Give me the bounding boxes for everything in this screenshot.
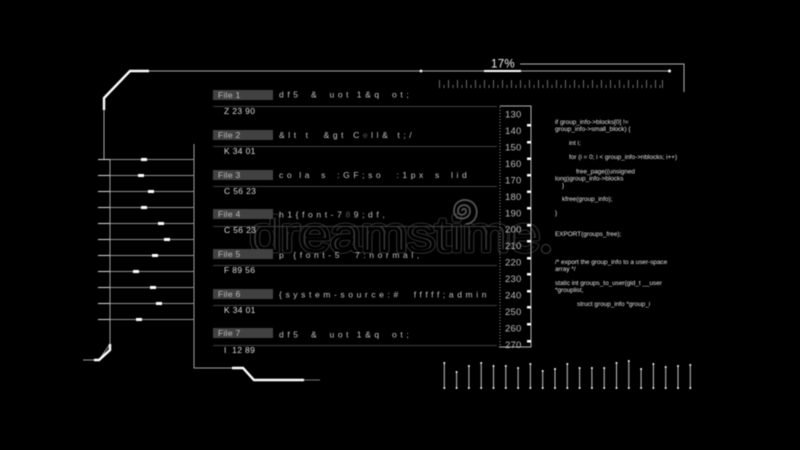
file 3: co la s :GF;so :1px s lid [279, 170, 470, 180]
source code block: } [555, 210, 558, 217]
source code block: kfree(group_info); [562, 196, 613, 203]
source code block: } [562, 182, 565, 190]
source code block: if group_info->blocks[0] != [555, 119, 629, 126]
file 1: df5 & uot 1&q ot; [279, 90, 412, 100]
file 5 [213, 249, 423, 275]
left slider panel [83, 144, 320, 380]
file 7: File 7 [218, 328, 241, 338]
scale numbers: 190 [505, 208, 521, 220]
source code block: struct group_info *group_i [577, 301, 650, 308]
file 5: p {font-5 7:normal, [279, 250, 423, 260]
file 7 [213, 328, 412, 355]
file 2: File 2 [218, 130, 241, 140]
scale numbers: 180 [505, 192, 521, 203]
file 3: C 56 23 [224, 186, 256, 196]
file 2 [213, 130, 415, 156]
source code block: array */ [555, 266, 576, 273]
scale numbers [505, 110, 521, 351]
file 7: df5 & uot 1&q ot; [279, 330, 412, 340]
source code block: for (i = 0; i < group_info->nblocks; i++) [569, 154, 677, 161]
source code block: free_page((unsigned [576, 168, 635, 176]
source code block: int i; [569, 140, 581, 147]
file 4: File 4 [218, 209, 241, 219]
source code block: static int groups_to_user(gid_t __user [555, 280, 663, 287]
scale numbers: 230 [505, 274, 521, 285]
file 3: File 3 [218, 170, 241, 180]
file 6: K 34 01 [224, 305, 256, 315]
slider knobs [133, 158, 170, 321]
source code block: group_info->small_block) { [555, 126, 631, 133]
file row dividers [213, 106, 497, 346]
scale numbers: 200 [505, 224, 521, 236]
file 6: File 6 [218, 289, 241, 299]
slider ticks [98, 160, 110, 320]
file 4: h1{font-789;df, [279, 210, 388, 220]
source code block: EXPORT(groups_free); [555, 231, 622, 238]
gauge caps [443, 360, 691, 389]
scale numbers: 270 [505, 340, 521, 351]
scale numbers: 260 [505, 324, 521, 334]
scale ticks [527, 124, 531, 342]
scale numbers: 250 [505, 307, 521, 318]
file 1: Z 23 90 [224, 106, 255, 116]
file 7: I 12 89 [224, 345, 255, 355]
source code block: long)group_info->blocks [555, 176, 623, 182]
scale numbers: 220 [505, 258, 521, 268]
source code block [555, 119, 677, 308]
scale numbers: 140 [505, 126, 521, 137]
top frame line [104, 64, 684, 159]
percentage label: 17% [491, 58, 515, 70]
top ruler [440, 80, 662, 88]
source code block: /* export the group_info to a user-space [555, 259, 668, 266]
bottom bar gauge [443, 360, 691, 389]
slider lines [110, 160, 194, 320]
file 2: &lt t &gt Cell& t;/ [279, 130, 415, 140]
file 1 [213, 90, 412, 116]
file 5: File 5 [218, 249, 241, 259]
scale numbers: 130 [505, 110, 521, 120]
source code block: *grouplist, [555, 287, 584, 294]
file 6: {system-source:# fffff;admin [279, 290, 490, 300]
scale numbers: 170 [505, 176, 521, 186]
scale numbers: 240 [505, 290, 521, 302]
scale numbers: 150 [505, 142, 521, 154]
file 6 [213, 289, 490, 315]
file table [213, 90, 497, 355]
file 3 [213, 170, 470, 196]
file 4 [213, 209, 388, 235]
file 4: C 56 23 [224, 225, 256, 235]
watermark: dreamstime [250, 209, 540, 262]
watermark: dreamstime [250, 209, 540, 262]
file 5: F 89 56 [224, 265, 255, 275]
file 2: K 34 01 [224, 146, 256, 156]
file 1: File 1 [218, 90, 241, 100]
vertical number scale [499, 106, 531, 351]
scale numbers: 160 [505, 159, 521, 170]
scale numbers: 210 [505, 241, 521, 252]
